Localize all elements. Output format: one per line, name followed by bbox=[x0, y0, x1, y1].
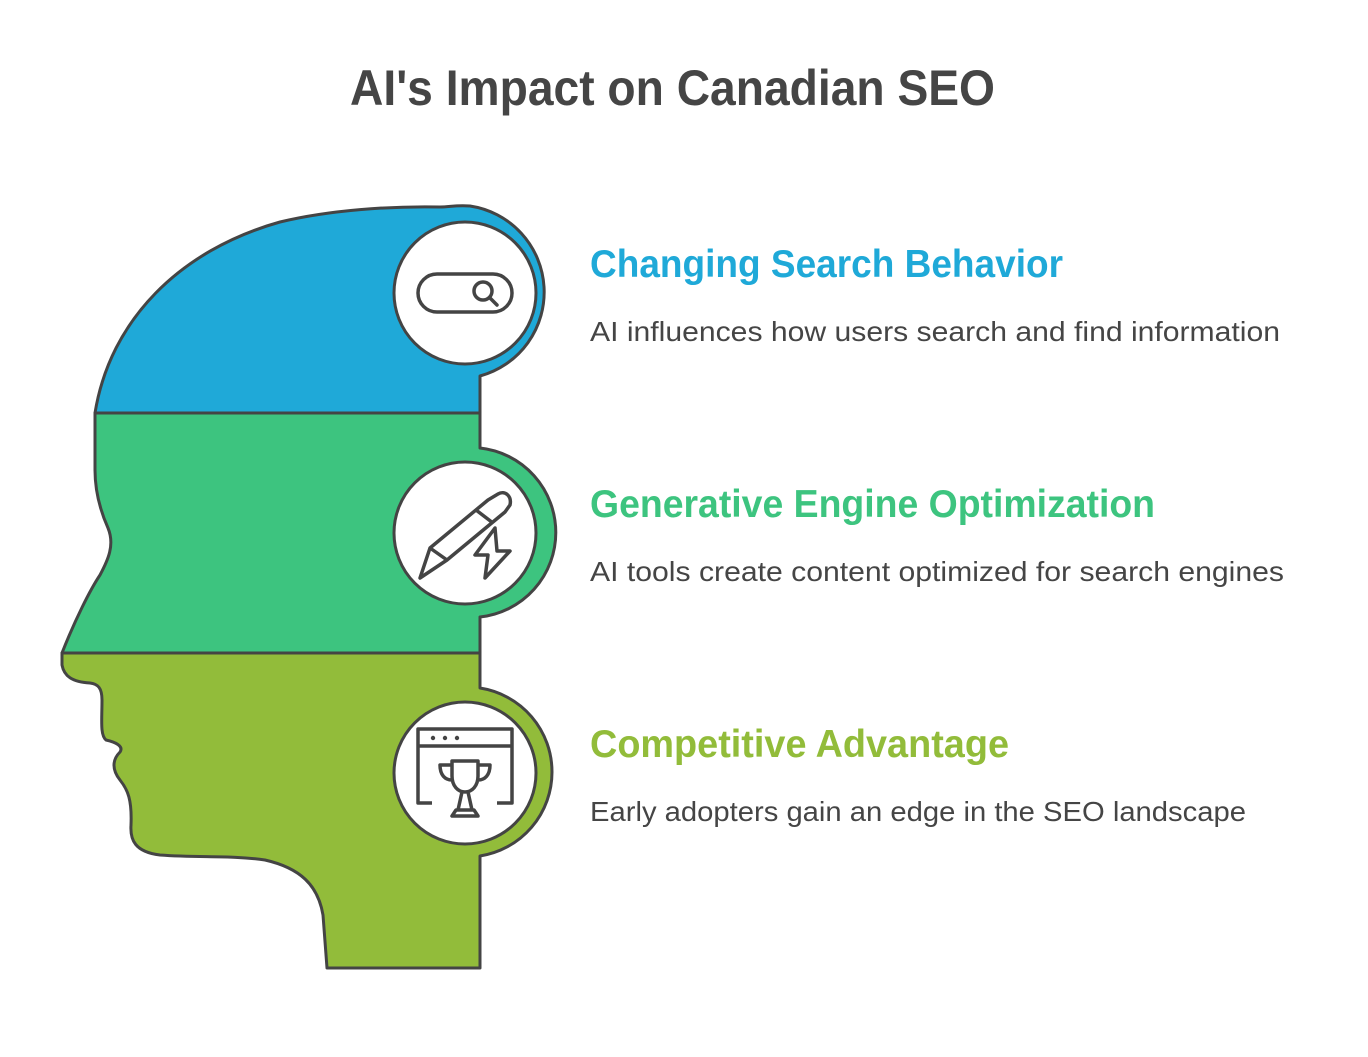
text: GEO description: AI tools create content optimized for search engines bbox=[590, 556, 1284, 587]
icon: trophy in browser bbox=[394, 702, 536, 844]
head: lime section bbox=[62, 653, 552, 968]
heading: changing search behavior: Changing Search Behavior bbox=[590, 243, 1063, 286]
head: green section bbox=[62, 413, 556, 653]
head: blue section bbox=[95, 206, 544, 413]
heading: competitive advantage: Competitive Advantage bbox=[590, 723, 1009, 766]
title: AI's Impact on Canadian SEO bbox=[350, 60, 995, 116]
heading: generative engine optimization: Generative Engine Optimization bbox=[590, 483, 1155, 526]
text: search behavior description: AI influences how users search and find information bbox=[590, 316, 1280, 347]
text: competitive advantage description: Early adopters gain an edge in the SEO landscape bbox=[590, 796, 1246, 827]
icon: search bar bbox=[394, 222, 536, 364]
icon: pencil with lightning bbox=[394, 462, 536, 604]
